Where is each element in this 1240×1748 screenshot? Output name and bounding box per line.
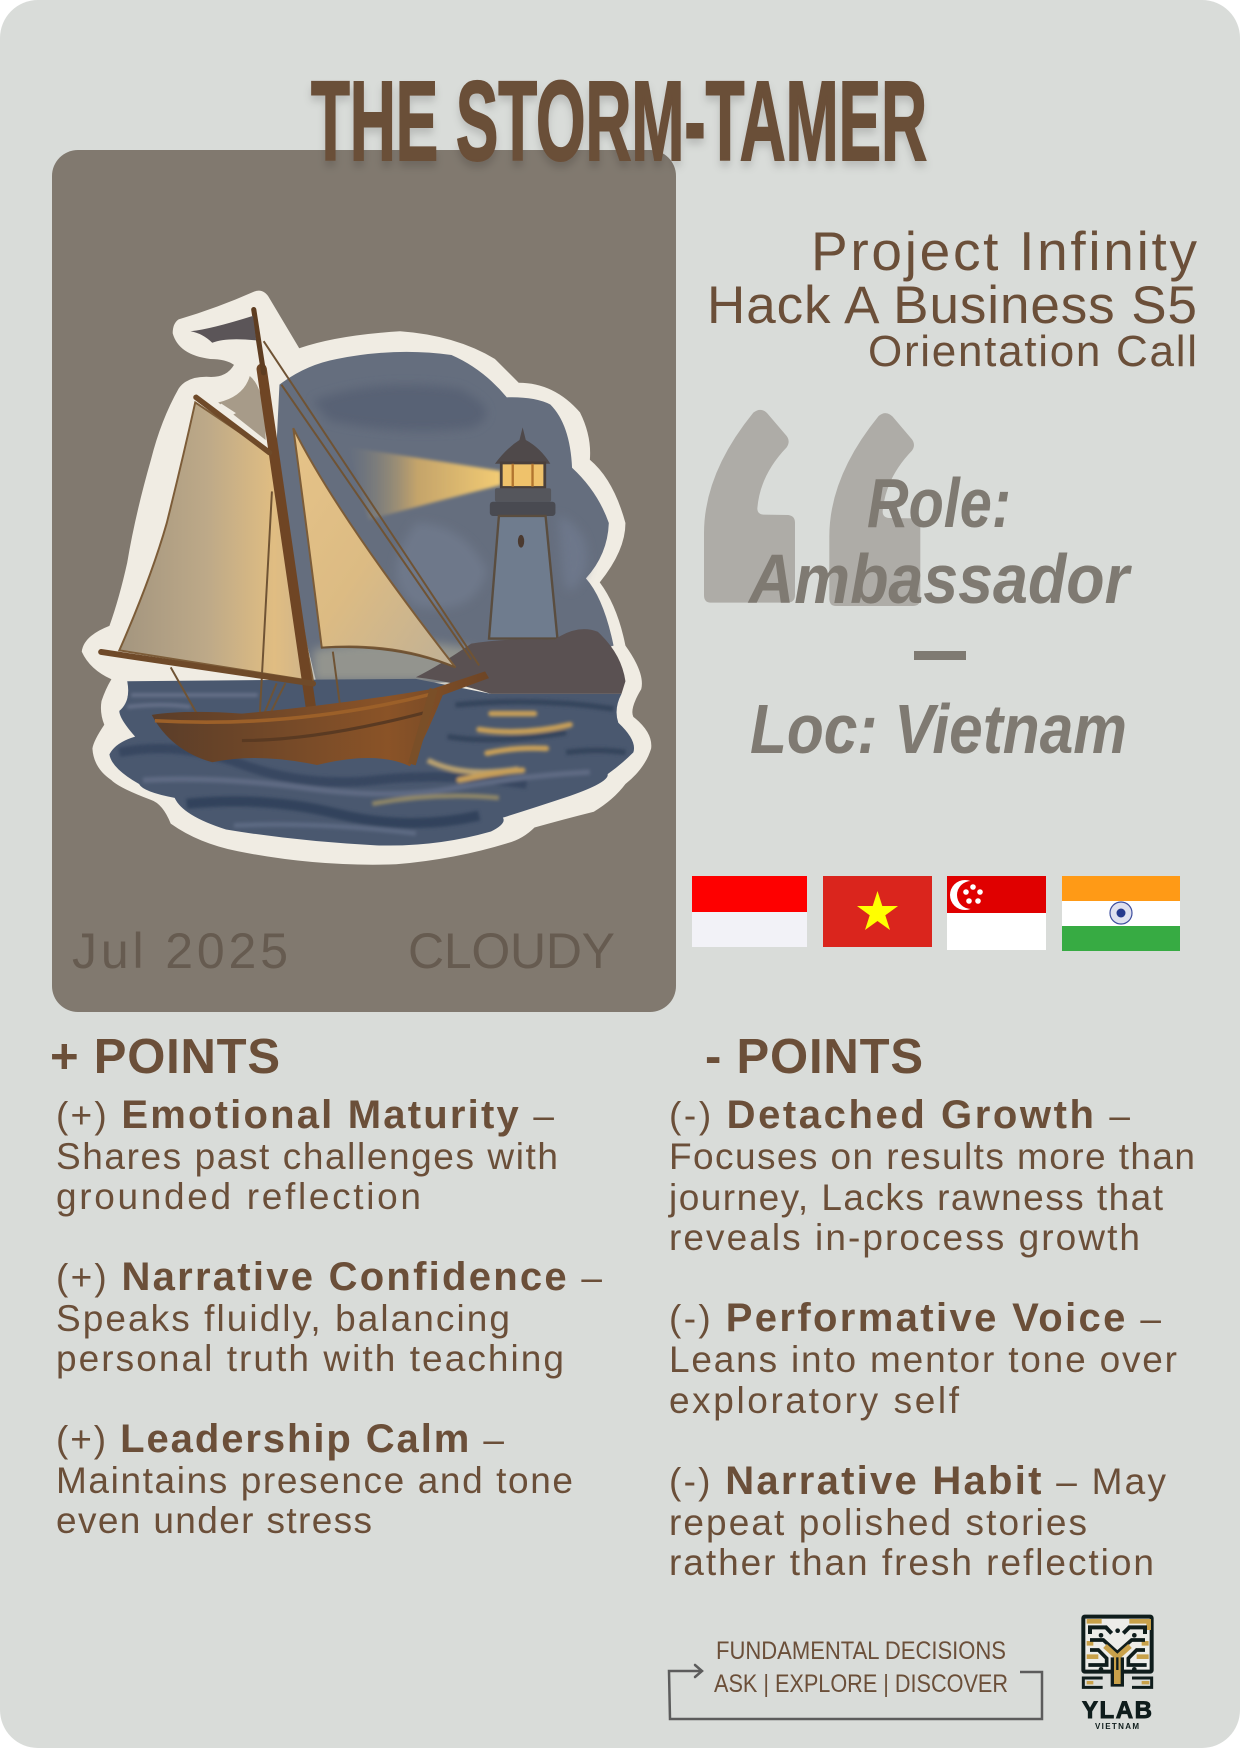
rigging	[171, 341, 479, 717]
icon: India flag	[1062, 876, 1180, 951]
arrow: loop around tagline	[669, 1665, 1042, 1719]
lighthouse	[495, 427, 550, 464]
icon: Singapore flag	[947, 876, 1046, 950]
text block: emotional maturity: grounded reflection	[56, 1176, 421, 1217]
panel: illustration card	[52, 150, 676, 1012]
light beam	[349, 447, 501, 520]
text block: role and location: Loc: Vietnam	[750, 690, 1127, 768]
logo wordmark: YLAB	[1082, 1697, 1152, 1724]
text block: leadership calm: Maintains presence and tone	[56, 1460, 573, 1501]
text block: emotional maturity: (+) Emotional Maturity –	[56, 1093, 554, 1137]
mast and spars	[262, 369, 311, 709]
text block: role and location: Role:	[867, 464, 1011, 542]
text block: performative voice	[669, 1296, 1177, 1421]
sky	[274, 352, 614, 685]
logo subtitle: VIETNAM	[1095, 1722, 1139, 1731]
text block: project info: Project Infinity	[811, 220, 1198, 282]
heading: plus points: + POINTS	[50, 1030, 280, 1084]
text block: narrative habit: repeat polished stories	[669, 1502, 1087, 1543]
panel: positive points	[50, 1030, 602, 1541]
text block: leadership calm	[56, 1417, 573, 1541]
flag	[190, 316, 256, 343]
text block: detached growth	[668, 1093, 1195, 1258]
icon: sailboat and lighthouse sticker	[82, 291, 651, 865]
text block: leadership calm: even under stress	[56, 1500, 372, 1541]
text block: emotional maturity	[56, 1093, 558, 1217]
panel: negative points	[668, 1030, 1195, 1583]
icon: Indonesia flag	[692, 876, 807, 947]
text block: project info: Orientation Call	[868, 327, 1197, 376]
text block: narrative habit: rather than fresh reflection	[669, 1542, 1154, 1583]
sea	[109, 679, 634, 846]
icon: Vietnam flag	[823, 876, 932, 947]
flags	[692, 876, 1180, 951]
text block: detached growth: reveals in-process growth	[669, 1217, 1140, 1258]
text block: performative voice: exploratory self	[669, 1380, 960, 1421]
footer tagline	[714, 1637, 1008, 1698]
weather label: CLOUDY	[408, 923, 615, 979]
text block: detached growth: Focuses on results more than	[669, 1136, 1195, 1177]
sails	[218, 376, 266, 440]
text block: performative voice: (-) Performative Voice –	[669, 1296, 1161, 1340]
text block: project info	[707, 220, 1198, 376]
icon: quotation marks	[704, 410, 920, 606]
footer tagline: ASK | EXPLORE | DISCOVER	[714, 1670, 1008, 1698]
text block: narrative confidence: Speaks fluidly, balancing	[56, 1298, 510, 1339]
logo: YLAB Vietnam	[1082, 1617, 1152, 1731]
text block: leadership calm: (+) Leadership Calm –	[56, 1417, 504, 1461]
text block: role and location: Ambassador	[747, 540, 1132, 618]
hull	[152, 671, 489, 766]
text block: narrative confidence	[56, 1255, 602, 1379]
text block: detached growth: journey, Lacks rawness that	[668, 1177, 1164, 1218]
icon: YLAB maze mark	[1083, 1617, 1152, 1687]
text block: emotional maturity: Shares past challenges with	[56, 1136, 558, 1177]
heading: minus points: - POINTS	[705, 1030, 923, 1084]
footer tagline: FUNDAMENTAL DECISIONS	[716, 1637, 1006, 1665]
text block: role and location	[747, 464, 1132, 768]
text block: narrative confidence: personal truth with teaching	[56, 1338, 564, 1379]
rock	[416, 629, 625, 694]
text block: narrative confidence: (+) Narrative Confidence –	[56, 1255, 602, 1299]
text block: project info: Hack A Business S5	[707, 276, 1197, 335]
text block: detached growth: (-) Detached Growth –	[669, 1093, 1130, 1137]
text block: performative voice: Leans into mentor tone over	[669, 1339, 1177, 1380]
text block: narrative habit: (-) Narrative Habit – May	[669, 1459, 1166, 1503]
text block: narrative habit	[669, 1459, 1166, 1583]
date label: Jul 2025	[72, 923, 288, 979]
